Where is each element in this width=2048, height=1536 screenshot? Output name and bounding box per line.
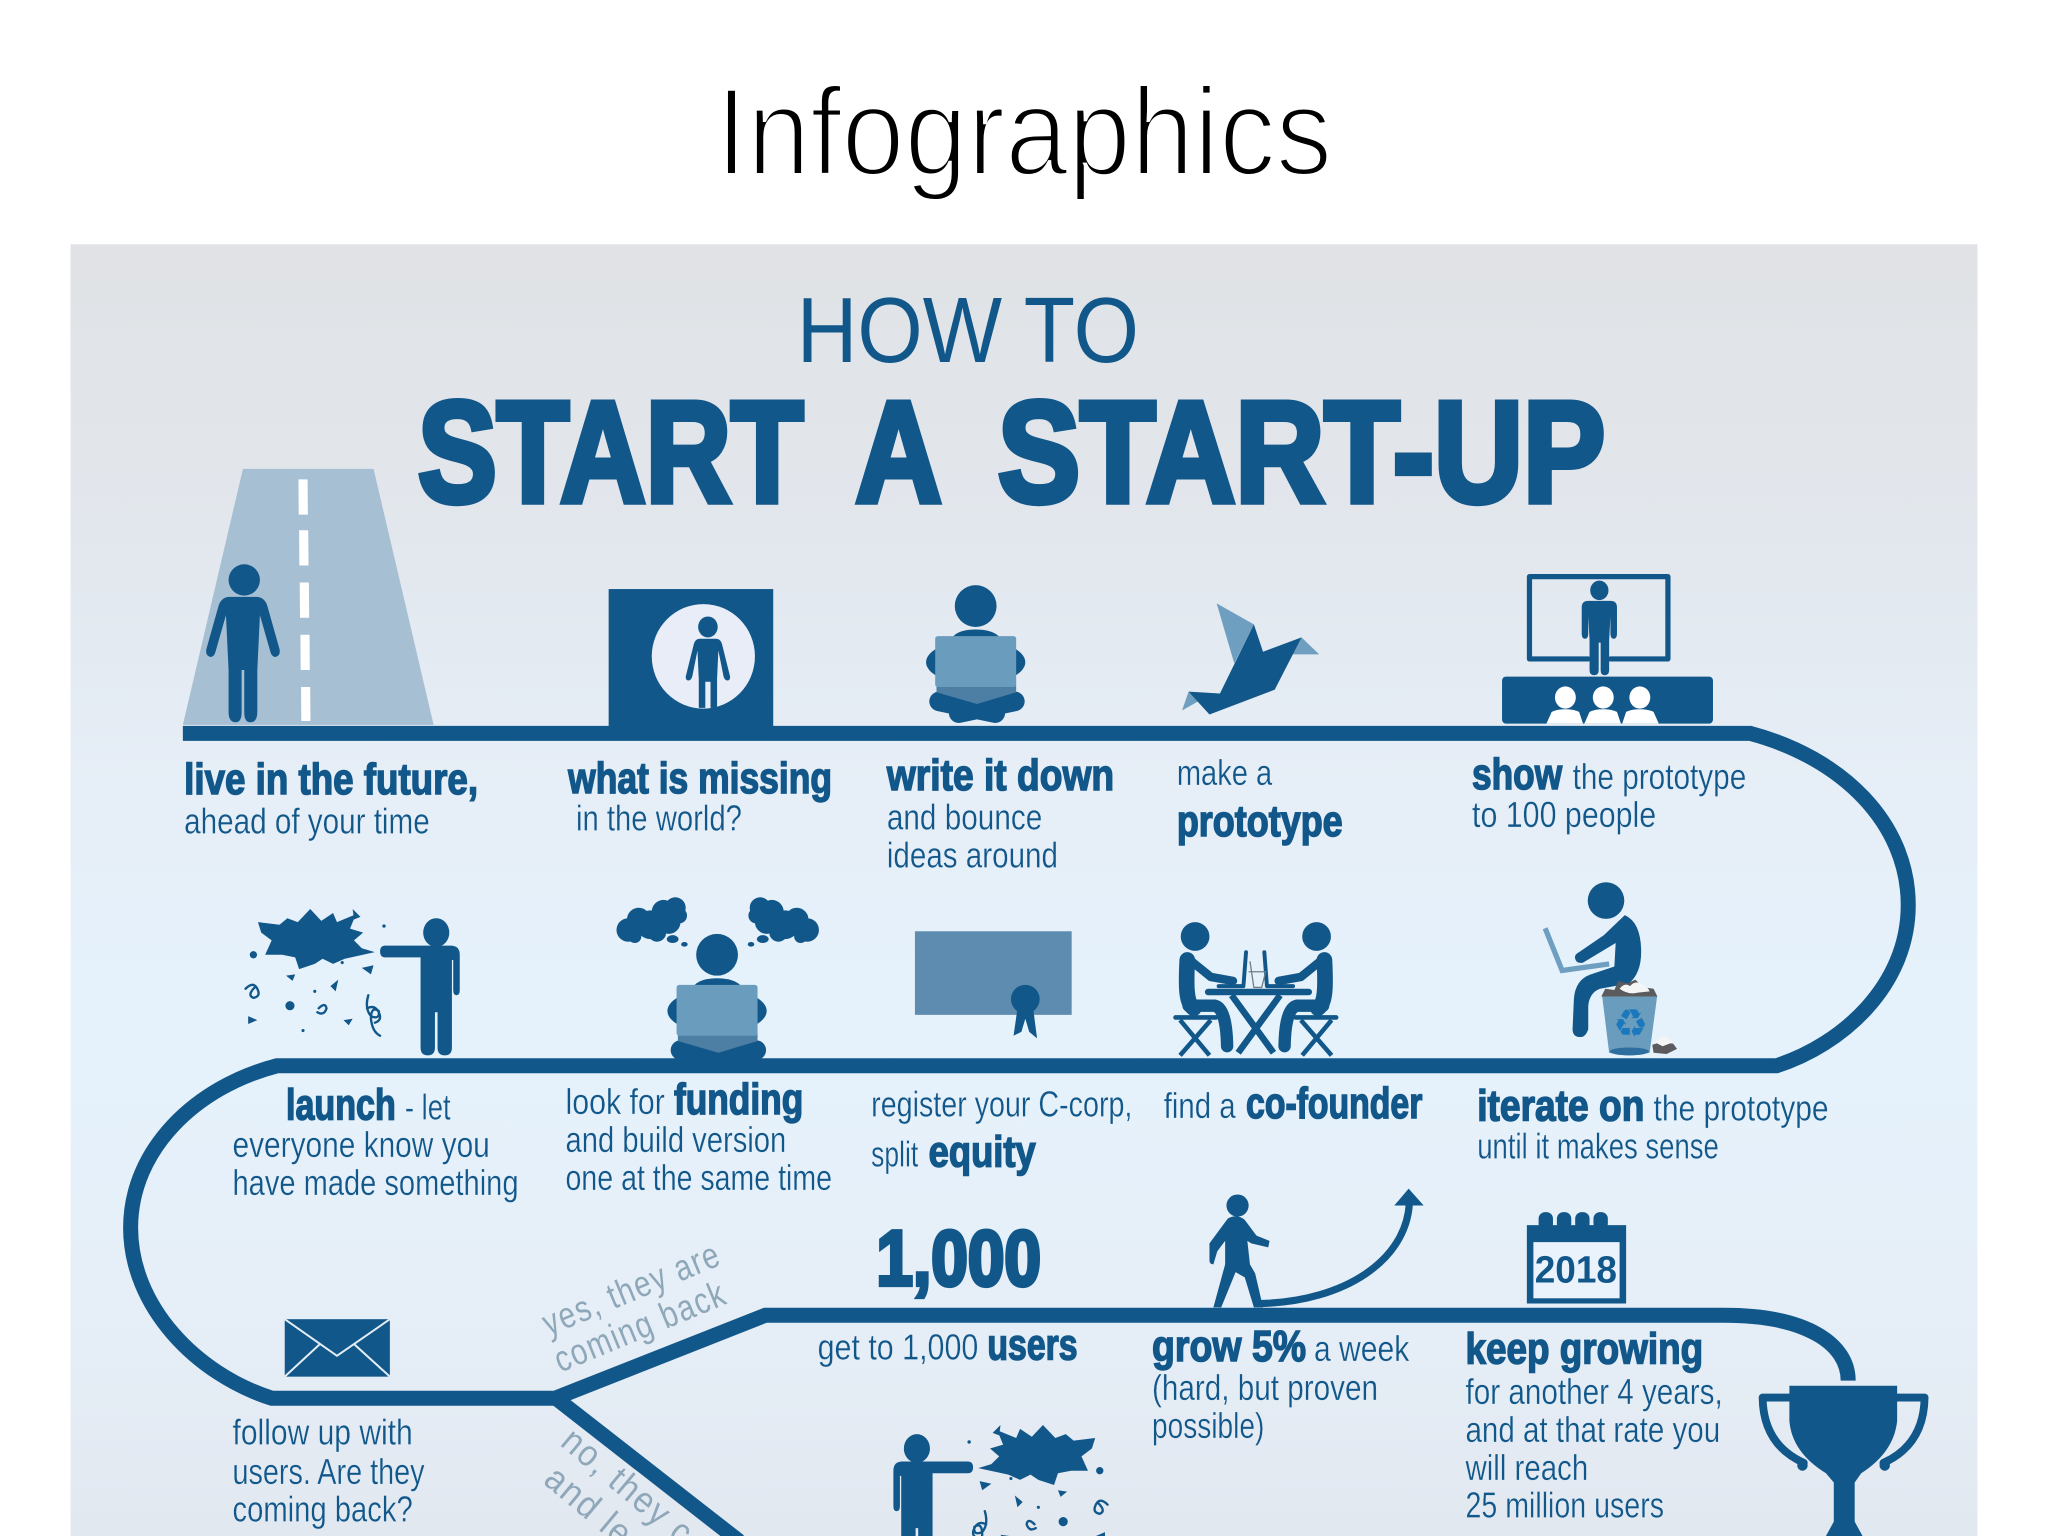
- text: grow 5% a week: grow 5%: [1152, 1323, 1306, 1371]
- text: find a co-founder: co-founder: [1246, 1080, 1423, 1128]
- icon: launch with confetti, second outcome: [893, 1425, 1108, 1536]
- text: live in the future: [184, 756, 478, 841]
- icon: person writing on a laptop: [926, 585, 1025, 713]
- text: follow up with users: follow up with: [232, 1412, 413, 1453]
- text: write it down: ideas around: [887, 834, 1058, 875]
- text: grow 5% a week: possible): [1152, 1405, 1264, 1446]
- text: live in the future: live in the future,: [184, 756, 478, 804]
- icon: person thinking with laptop and clouds: [616, 897, 819, 1062]
- text: grow 5% a week: (hard, but proven: [1152, 1367, 1378, 1408]
- text: get to 1,000 users: [818, 1322, 1078, 1370]
- icon: 2018 calendar: [1527, 1212, 1626, 1304]
- icon: person in a spotlight box: [609, 589, 773, 726]
- text: find a co-founder: [1164, 1080, 1423, 1128]
- icon: walking person with growth arrow: [1209, 1189, 1424, 1307]
- text: look for funding: [566, 1076, 832, 1198]
- road path connector: [131, 733, 1908, 1536]
- text: what is missing: what is missing: [567, 755, 832, 803]
- text: look for funding: one at the same time: [566, 1157, 832, 1198]
- text: iterate on the prototype: until it makes sense: [1477, 1126, 1719, 1167]
- text: look for funding: look for: [566, 1081, 665, 1122]
- text: show the prototype: show: [1472, 751, 1563, 799]
- text: write it down: [886, 752, 1114, 875]
- text: follow up with users: users. Are they: [232, 1451, 425, 1492]
- text: keep growing: [1465, 1326, 1723, 1526]
- text: keep growing: 25 million users: [1465, 1485, 1664, 1526]
- heading: START A START-UP: [418, 373, 1605, 533]
- text: grow 5% a week: [1152, 1323, 1410, 1446]
- text: launch: [232, 1081, 519, 1203]
- text: iterate on the prototype: [1477, 1083, 1829, 1167]
- text: show the prototype: [1472, 751, 1746, 835]
- text: keep growing: keep growing: [1465, 1326, 1703, 1374]
- text: iterate on the prototype: the prototype: [1654, 1088, 1829, 1129]
- branch label: yes, they are coming back: [536, 1233, 732, 1380]
- text: register C-corp, split equity: register your C-corp,: [871, 1084, 1132, 1125]
- text: find a co-founder: find a: [1164, 1085, 1236, 1126]
- heading: START A START-UP: START: [418, 373, 803, 533]
- text: follow up with users: coming back?: [232, 1489, 413, 1530]
- text: get to 1,000 users: users: [987, 1322, 1078, 1370]
- text: keep growing: and at that rate you: [1465, 1409, 1720, 1450]
- heading: HOW TO: HOW TO: [797, 278, 1139, 382]
- text: register C-corp, split equity: equity: [929, 1128, 1036, 1176]
- text: keep growing: will reach: [1465, 1447, 1588, 1488]
- icon: 2018 calendar: 2018: [1535, 1250, 1617, 1292]
- icon: envelope: [285, 1319, 390, 1377]
- text: iterate on the prototype: iterate on: [1477, 1083, 1644, 1131]
- text: what is missing: [567, 755, 832, 839]
- text: make a prototype: make a: [1177, 752, 1273, 793]
- text: launch: - let: [405, 1086, 451, 1127]
- text: launch: launch: [286, 1081, 396, 1129]
- number: 1,000: 1,000: [876, 1214, 1041, 1302]
- text: make a prototype: [1177, 752, 1343, 846]
- text: register C-corp, split equity: split: [871, 1133, 918, 1174]
- text: make a prototype: prototype: [1177, 798, 1343, 846]
- text: what is missing: in the world?: [576, 798, 742, 839]
- icon: launch with confetti: [246, 909, 460, 1055]
- text: look for funding: funding: [674, 1076, 803, 1124]
- text: register C-corp, split equity: [871, 1084, 1132, 1176]
- text: live in the future: ahead of your time: [184, 800, 430, 841]
- text: write it down: and bounce: [887, 796, 1042, 837]
- title: Infographics: Infographics: [716, 61, 1332, 202]
- icon: person iterating on a laptop over a recycling bin: [1545, 882, 1677, 1055]
- text: launch: have made something: [232, 1162, 519, 1203]
- icon: road with person: [183, 469, 434, 725]
- text: get to 1,000 users: get to 1,000: [818, 1327, 978, 1368]
- icon: trophy: [1763, 1386, 1925, 1536]
- icon: two co-founders at a table: [1176, 922, 1336, 1055]
- icon: presenting prototype to audience: [1502, 577, 1713, 724]
- text: grow 5% a week: a week: [1314, 1328, 1410, 1369]
- text: launch: everyone know you: [232, 1124, 490, 1165]
- icon: origami paper bird: [1182, 603, 1319, 714]
- text: keep growing: for another 4 years,: [1465, 1371, 1723, 1412]
- branch label: yes, they are coming back: yes, they are: [536, 1233, 727, 1344]
- icon: person iterating on a laptop over a recycling bin: ♻: [1613, 1002, 1648, 1047]
- text: follow up with users: [232, 1412, 425, 1530]
- icon: certificate with seal: [915, 931, 1072, 1038]
- panel: infographic background: [71, 244, 1977, 1536]
- text: look for funding: and build version: [566, 1119, 786, 1160]
- heading: START A START-UP: A: [856, 373, 942, 533]
- heading: START A START-UP: START-UP: [998, 373, 1605, 533]
- branch label: yes, they are coming back: coming back: [548, 1272, 732, 1380]
- text: show the prototype: to 100 people: [1472, 794, 1656, 835]
- text: show the prototype: the prototype: [1573, 756, 1746, 797]
- text: write it down: write it down: [886, 752, 1114, 800]
